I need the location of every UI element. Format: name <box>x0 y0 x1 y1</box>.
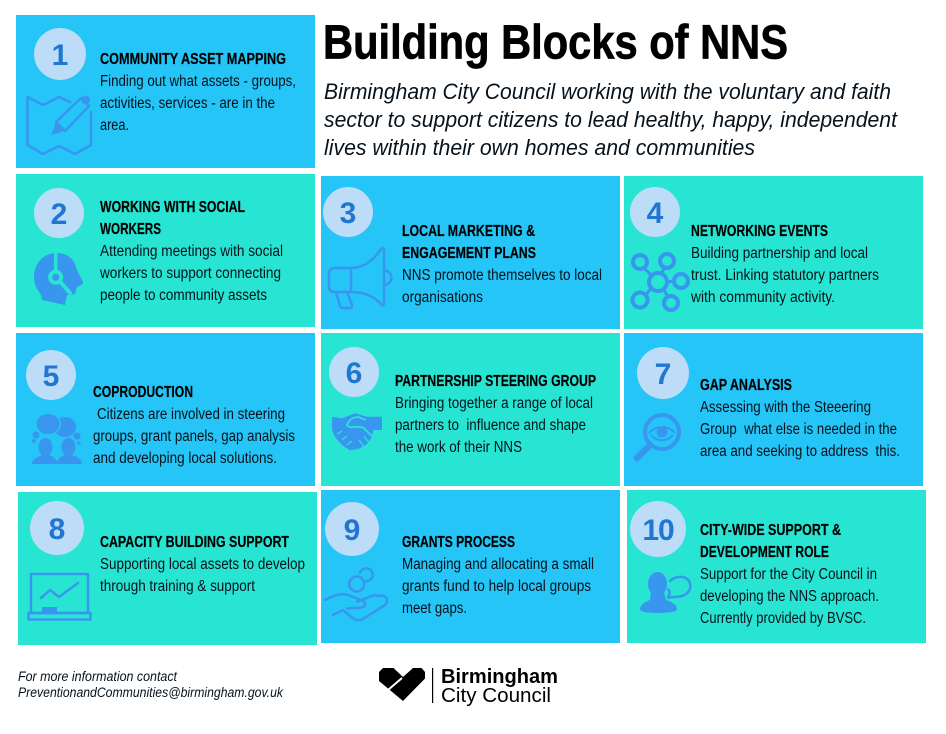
icon: megaphone <box>329 248 392 308</box>
panel 7: gap analysis: Assessing with the Steeering <box>700 399 871 416</box>
panel 10: city-wide support and development role: DEVELOPMENT ROLE <box>700 544 829 561</box>
icon: presentation board <box>28 574 90 620</box>
panel 8: capacity building support: CAPACITY BUILDING SUPPORT <box>100 534 289 551</box>
panel 10: city-wide support and development role: 10 <box>642 514 674 547</box>
panel 8: capacity building support <box>18 492 317 645</box>
panel 9: grants process <box>321 490 620 643</box>
panel 7: gap analysis: area and seeking to address this. <box>700 443 900 460</box>
icon: magnifier with eye <box>637 415 679 458</box>
panel 2: working with social workers: Attending meetings with social <box>100 243 283 260</box>
icon: head with headset <box>34 253 83 305</box>
panel 2: working with social workers: people to community assets <box>100 287 267 304</box>
panel 8: capacity building support: through training & support <box>100 578 256 595</box>
panel 6: partnership steering group <box>321 333 620 486</box>
subtitle <box>324 79 899 160</box>
subtitle: lives within their own homes and communities <box>324 135 755 160</box>
panel 3: local marketing and engagement plans: 3 <box>340 197 356 230</box>
panel 6: partnership steering group: 6 <box>346 357 362 390</box>
panel 4: networking events: with community activity. <box>690 289 835 306</box>
panel 3: local marketing and engagement plans <box>321 176 620 329</box>
panel 1: community asset mapping: COMMUNITY ASSET MAPPING <box>100 51 286 68</box>
subtitle: sector to support citizens to lead healthy, happy, independent <box>324 107 899 132</box>
panel 3: local marketing and engagement plans: ENGAGEMENT PLANS <box>402 245 536 262</box>
panel 4: networking events <box>624 176 923 329</box>
panel 9: grants process: Managing and allocating a small <box>402 556 594 573</box>
panel 9: grants process: meet gaps. <box>402 600 467 617</box>
panel 3: local marketing and engagement plans: LOCAL MARKETING & <box>402 223 535 240</box>
panel 1: community asset mapping: area. <box>100 117 129 134</box>
icon: map and pencil <box>28 96 91 154</box>
logo: Birmingham City Council: City Council <box>441 685 551 707</box>
panel 4: networking events: NETWORKING EVENTS <box>691 223 828 240</box>
icon: people talking <box>32 413 82 464</box>
panel 10: city-wide support and development role: developing the NNS approach. <box>700 588 879 605</box>
panel 2: working with social workers: 2 <box>51 198 67 231</box>
icon: network nodes <box>632 254 688 310</box>
panel 6: partnership steering group: partners to influence and shape <box>395 417 586 434</box>
panel 1: community asset mapping: activities, services - are in the <box>100 95 275 112</box>
panel 1: community asset mapping: Finding out what assets - groups, <box>100 73 296 90</box>
logo: Birmingham City Council: Birmingham <box>441 666 558 688</box>
panel 7: gap analysis <box>624 333 923 486</box>
title: Building Blocks of NNS <box>323 16 788 70</box>
panel 9: grants process: GRANTS PROCESS <box>402 534 515 551</box>
panel 9: grants process: grants fund to help local groups <box>402 578 591 595</box>
logo: Birmingham City Council <box>379 666 558 707</box>
panel 4: networking events: 4 <box>647 197 664 230</box>
panel 7: gap analysis: Group what else is needed in the <box>700 421 897 438</box>
panel 1: community asset mapping <box>16 15 315 168</box>
panel 10: city-wide support and development role: Support for the City Council in <box>700 566 877 583</box>
panel 6: partnership steering group: the work of their NNS <box>395 439 522 456</box>
subtitle: Birmingham City Council working with the voluntary and faith <box>324 79 891 104</box>
panel 5: coproduction <box>16 333 315 486</box>
panel 8: capacity building support: 8 <box>49 513 65 546</box>
panel 5: coproduction: groups, grant panels, gap analysis <box>93 428 295 445</box>
panel 4: networking events: Building partnership and local <box>691 245 868 262</box>
panel 5: coproduction: COPRODUCTION <box>93 384 193 401</box>
panel 6: partnership steering group: PARTNERSHIP STEERING GROUP <box>395 373 596 390</box>
panel 5: coproduction: Citizens are involved in steering <box>97 406 285 423</box>
panel 10: city-wide support and development role <box>627 490 926 643</box>
panel 3: local marketing and engagement plans: NNS promote themselves to local <box>402 267 602 284</box>
panel 8: capacity building support: Supporting local assets to develop <box>100 556 305 573</box>
panel 9: grants process: 9 <box>344 514 360 547</box>
panel 4: networking events: trust. Linking statutory partners <box>691 267 879 284</box>
icon: hand with coins <box>325 568 387 620</box>
contact information: For more information contact <box>18 669 178 684</box>
panel 10: city-wide support and development role: Currently provided by BVSC. <box>700 610 866 627</box>
panel 2: working with social workers: workers to support connecting <box>99 265 281 282</box>
panel 6: partnership steering group: Bringing together a range of local <box>395 395 593 412</box>
panel 2: working with social workers: WORKING WITH SOCIAL <box>100 199 245 216</box>
panel 3: local marketing and engagement plans: organisations <box>402 289 483 306</box>
panel 5: coproduction: 5 <box>43 360 59 393</box>
panel 7: gap analysis: 7 <box>655 358 671 391</box>
panel 5: coproduction: and developing local solutions. <box>93 450 277 467</box>
icon: handshake <box>332 413 382 450</box>
panel 7: gap analysis: GAP ANALYSIS <box>700 377 792 394</box>
panel 2: working with social workers <box>16 174 315 327</box>
panel 2: working with social workers: WORKERS <box>100 221 161 238</box>
icon: person with speech bubble <box>640 572 690 613</box>
panel 10: city-wide support and development role: CITY-WIDE SUPPORT & <box>700 522 841 539</box>
panel 1: community asset mapping: 1 <box>52 39 68 72</box>
contact information <box>18 669 284 700</box>
contact information: PreventionandCommunities@birmingham.gov.uk <box>18 685 284 700</box>
